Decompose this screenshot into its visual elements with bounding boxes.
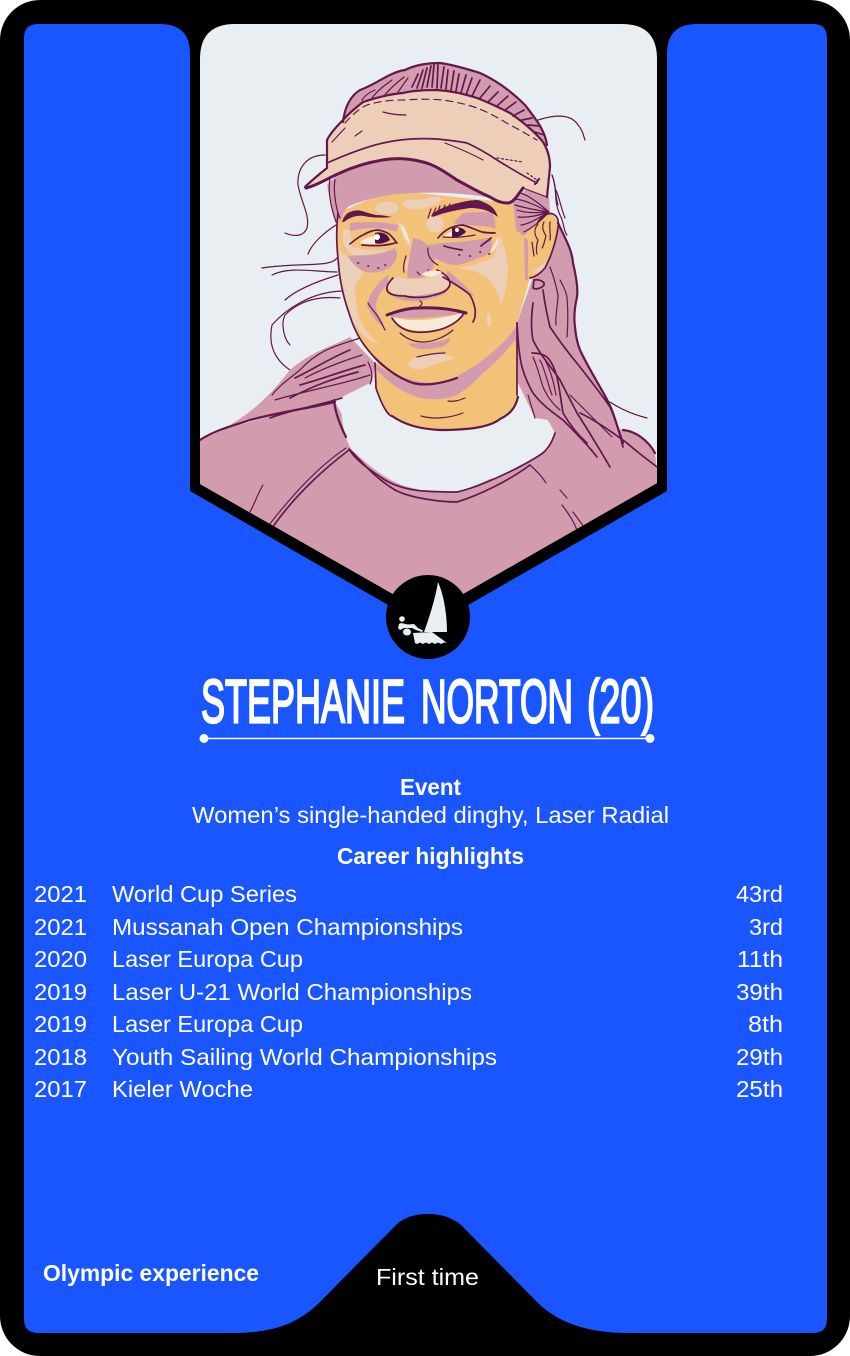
olympic experience label: Olympic experience: [43, 1260, 259, 1286]
career highlights table: [34, 881, 783, 1102]
hair behind visor, left: [327, 174, 340, 222]
freckles and face lines: [358, 238, 491, 275]
white collar: [342, 382, 549, 492]
row 2018 Youth Sailing World Championships: 29th: [736, 1044, 783, 1070]
row 2019 Laser Europa Cup: Laser Europa Cup: [112, 1011, 303, 1037]
face peach highlights: [338, 197, 548, 369]
neck: [375, 325, 518, 430]
row 2020 Laser Europa Cup: 11th: [737, 946, 783, 972]
row 2020 Laser Europa Cup: Laser Europa Cup: [112, 946, 303, 972]
face skin: [338, 193, 558, 363]
row 2019 Laser U-21 World Championships: 39th: [736, 979, 783, 1005]
row 2021 World Cup Series: [34, 881, 783, 907]
row 2019 Laser U-21 World Championships: 2019: [34, 979, 87, 1005]
row 2018 Youth Sailing World Championships: [34, 1044, 783, 1070]
row 2017 Kieler Woche: [34, 1076, 783, 1102]
name underline: [200, 734, 654, 743]
row 2019 Laser Europa Cup: [34, 1011, 783, 1037]
forehead shadow: [338, 160, 487, 212]
olympic experience value: First time: [376, 1264, 479, 1290]
row 2017 Kieler Woche: 2017: [34, 1076, 87, 1102]
row 2018 Youth Sailing World Championships: 2018: [34, 1044, 87, 1070]
nose lines: [387, 270, 450, 297]
right hair strokes: [517, 223, 657, 467]
row 2020 Laser Europa Cup: [34, 946, 783, 972]
white highlights: [401, 225, 498, 253]
row 2017 Kieler Woche: Kieler Woche: [112, 1076, 253, 1102]
row 2021 World Cup Series: World Cup Series: [112, 881, 297, 907]
row 2019 Laser Europa Cup: 2019: [34, 1011, 87, 1037]
name: first word: STEPHANIE: [201, 668, 405, 736]
row 2017 Kieler Woche: 25th: [736, 1076, 783, 1102]
row 2018 Youth Sailing World Championships: Youth Sailing World Championships: [112, 1044, 497, 1070]
hair strokes on top: [329, 63, 547, 222]
hair fan strokes: [515, 175, 565, 232]
row 2021 World Cup Series: 43rd: [736, 881, 783, 907]
name: age: (20): [587, 668, 654, 736]
row 2020 Laser Europa Cup: 2020: [34, 946, 87, 972]
shirt: [200, 403, 657, 594]
row 2021 Mussanah Open Championships: 2021: [34, 914, 87, 940]
visor lines: [305, 90, 550, 203]
event section: [192, 774, 669, 828]
row 2021 Mussanah Open Championships: 3rd: [749, 914, 783, 940]
row 2019 Laser U-21 World Championships: Laser U-21 World Championships: [112, 979, 472, 1005]
face pink shadows: [338, 204, 528, 349]
row 2021 World Cup Series: 2021: [34, 881, 87, 907]
face outlines: [337, 213, 518, 430]
eyes: [350, 225, 495, 246]
flying hair strands: [262, 116, 647, 418]
icon: sailing dinghy: [398, 582, 447, 644]
portrait illustration: [200, 24, 657, 624]
portrait background: [200, 24, 657, 624]
mouth: [387, 301, 466, 357]
shirt lines: [200, 400, 584, 530]
visor: [305, 90, 550, 203]
sport badge: [386, 575, 470, 659]
left hair bundle: [230, 337, 375, 425]
row 2019 Laser Europa Cup: 8th: [748, 1011, 783, 1037]
career highlights heading: Career highlights: [337, 843, 524, 869]
athlete name: [200, 668, 654, 743]
event section: Women’s single-handed dinghy, Laser Radial: [192, 802, 669, 828]
hair fan above ear: [513, 187, 550, 236]
right hair: [518, 228, 617, 430]
name: second word: NORTON: [421, 668, 573, 736]
neck shadow: [375, 325, 517, 399]
row 2019 Laser U-21 World Championships: [34, 979, 783, 1005]
badge circle: [386, 575, 470, 659]
left hair strokes: [270, 338, 372, 418]
ear: [530, 213, 558, 289]
row 2021 Mussanah Open Championships: Mussanah Open Championships: [112, 914, 463, 940]
top hair: [343, 63, 547, 145]
event section: Event: [400, 774, 461, 800]
row 2021 Mussanah Open Championships: [34, 914, 783, 940]
eyebrows: [342, 200, 498, 222]
